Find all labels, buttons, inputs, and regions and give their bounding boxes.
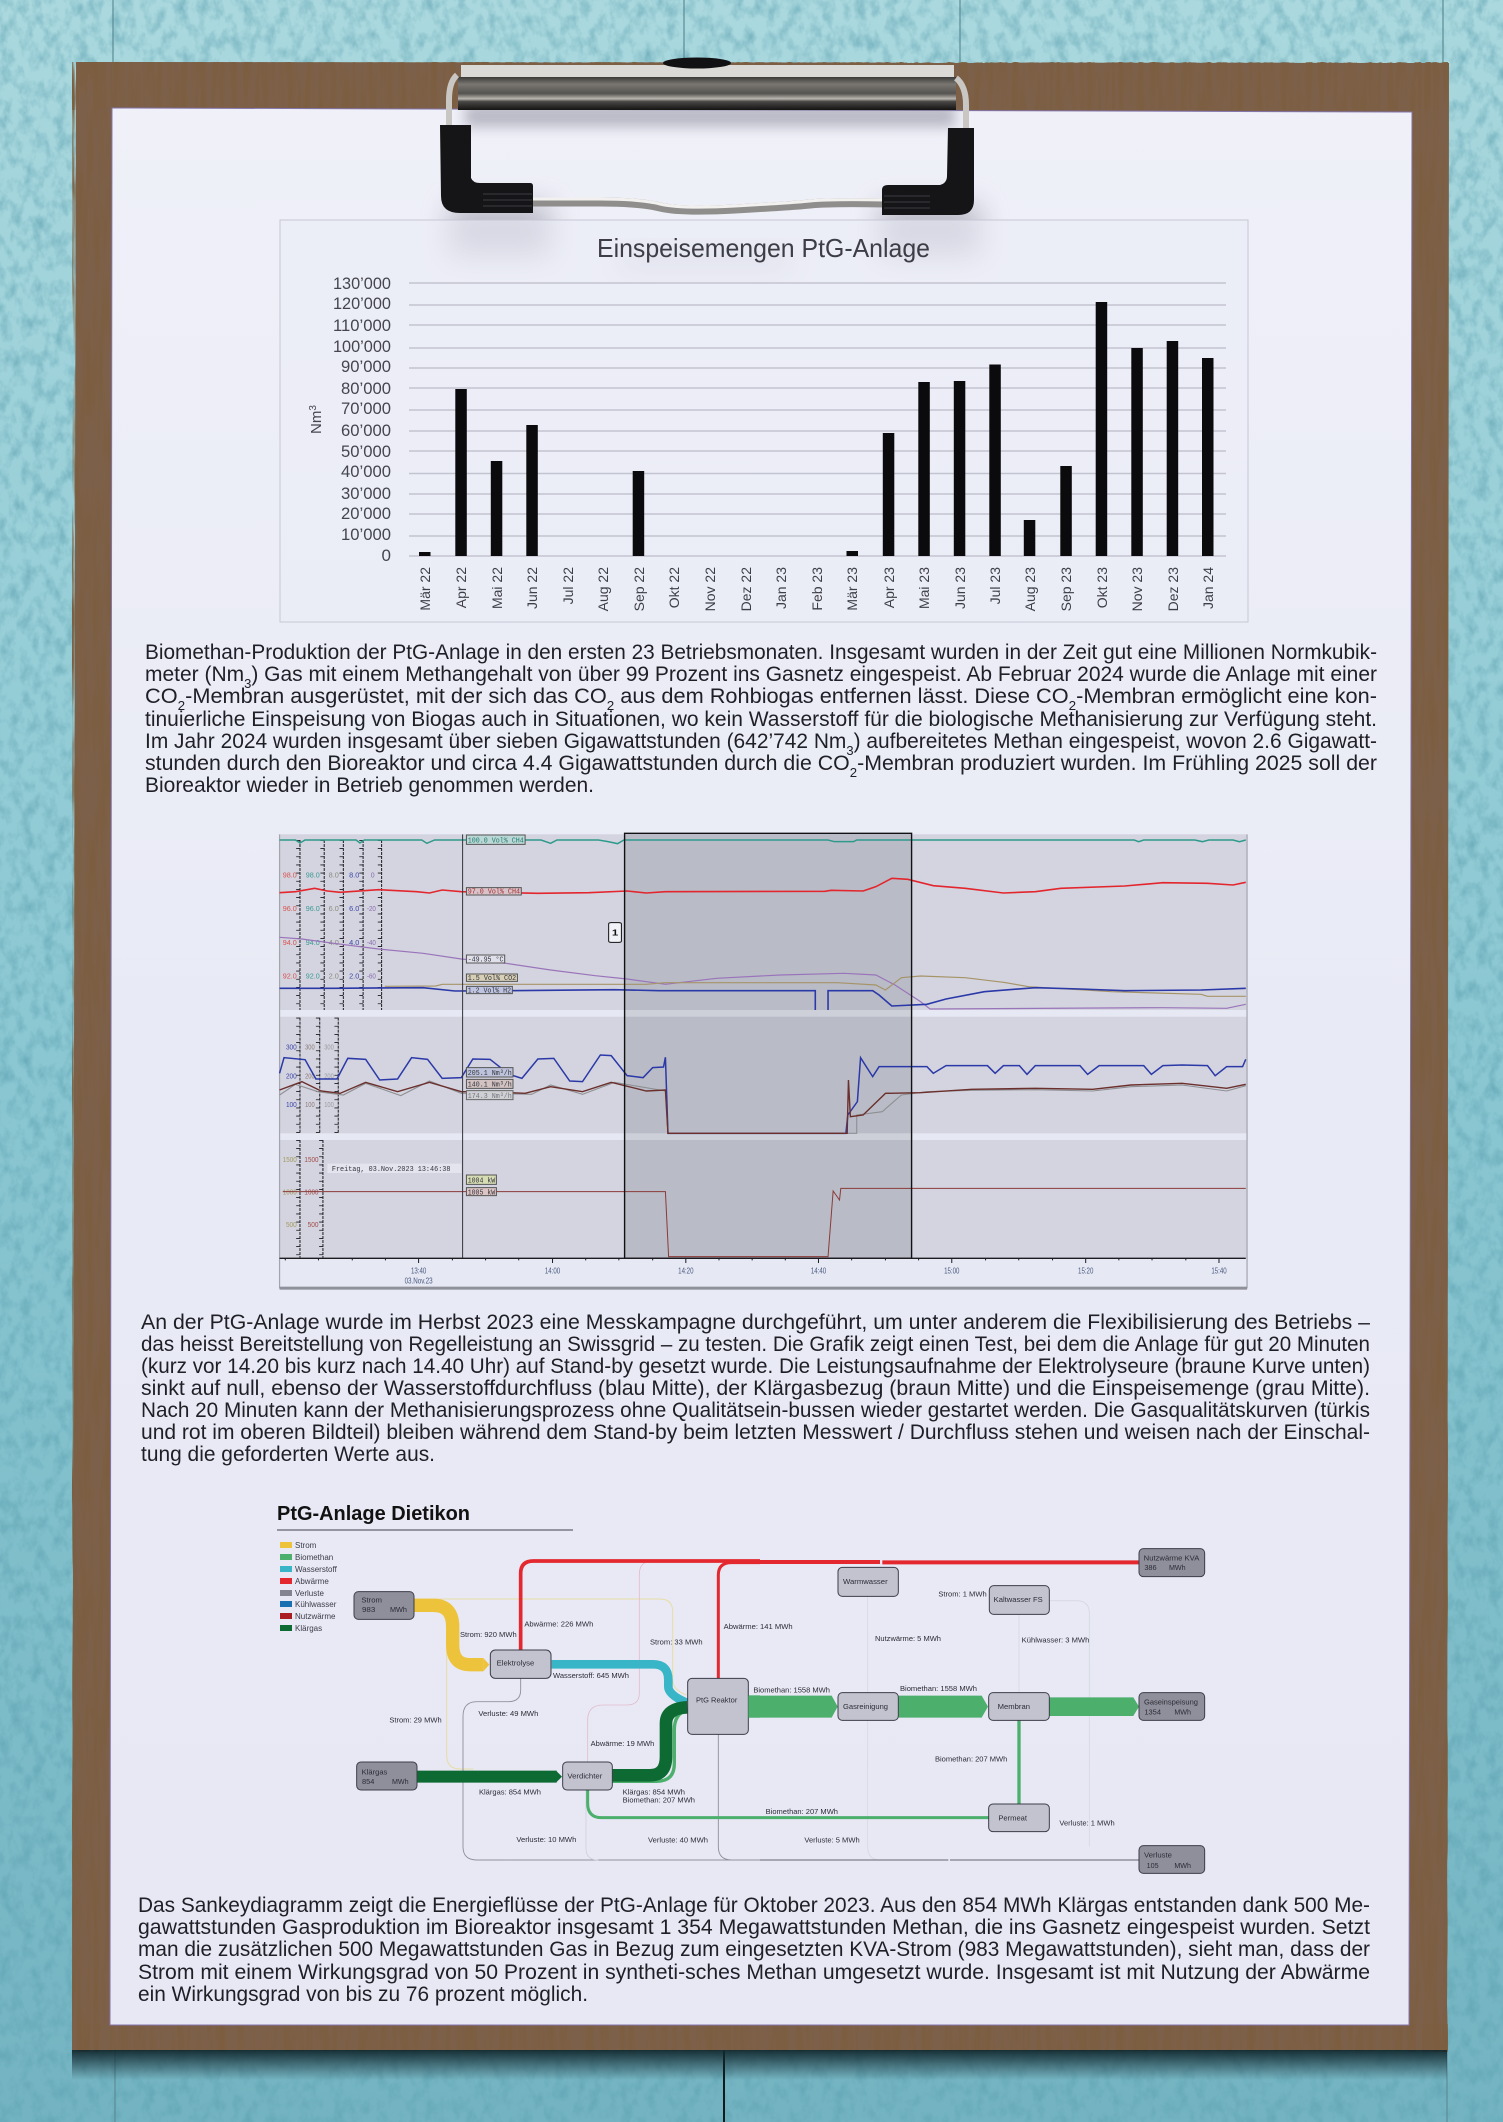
node: Verluste: MWh xyxy=(1174,1861,1191,1870)
x axis labels: Dez 23 xyxy=(1165,567,1181,611)
y axis title: 3 xyxy=(308,405,319,411)
time axis: 15:00 xyxy=(944,1266,960,1276)
text block: Biomethan production: Gas mit einem Methangehalt von über 99 Prozent ins Gasnetz eingespeist. Ab Februar 2024 wurde die Anlage mit einer xyxy=(264,663,1378,686)
text block: sankey explanation: Strom mit einem Wirkungsgrad von 50 Prozent in syntheti-sches Methan umgesetzt wurde. Insgesamt ist mit Nutzung der Abwärme xyxy=(138,1961,1370,1984)
axis labels: 1500 xyxy=(283,1156,297,1164)
flow: Abwärme 141 xyxy=(718,1563,760,1679)
time axis xyxy=(280,1258,1246,1285)
curve: electrolyser power xyxy=(283,1188,1246,1257)
axis labels: 100 xyxy=(305,1101,315,1109)
text block: Biomethan production: stunden durch den Bioreaktor und circa 4.4 Gigawattstunden durch die CO xyxy=(145,752,840,775)
text block: Biomethan production: 3 xyxy=(846,743,854,758)
node: Nutzwärme KVA: MWh xyxy=(1169,1563,1186,1572)
node: Gasreinigung xyxy=(838,1693,898,1720)
x axis labels xyxy=(417,567,1216,611)
node: Verluste: 105 xyxy=(1147,1861,1159,1870)
node: Verdichter: Verdichter xyxy=(567,1772,603,1781)
text block: measurement campaign: sinkt auf null, ebenso der Wasserstoffdurchfluss (blau Mitte), der Klärgasbezug (braun Mitte) und die Einspeisemenge (grau Mitte). xyxy=(141,1377,1370,1400)
y axis labels: 50’000 xyxy=(341,442,391,461)
stand-by window outline xyxy=(625,833,912,1258)
flow: Verluste xyxy=(463,1678,760,1860)
flow: Biomethan reactor out xyxy=(748,1695,760,1718)
sankey legend: Wasserstoff xyxy=(295,1565,338,1574)
flow labels left: Verluste: 49 MWh xyxy=(478,1709,538,1718)
text block: measurement campaign: und rot im oberen Bildteil) bleiben während dem Stand-by beim letzten Messwert / Durchfluss stehen und weisen nach der Einschal- xyxy=(141,1421,1370,1444)
sankey legend xyxy=(280,1541,338,1633)
metal clip xyxy=(440,58,974,215)
text block: sankey explanation xyxy=(138,1894,1370,2006)
flow labels left: Wasserstoff: 645 MWh xyxy=(553,1671,629,1680)
axis labels: 0 xyxy=(371,871,375,879)
flow labels left: Verluste: 40 MWh xyxy=(648,1836,708,1845)
flow labels left: Klärgas: 854 MWh xyxy=(623,1787,685,1796)
node: Strom: MWh xyxy=(390,1605,407,1614)
sankey legend: Nutzwärme xyxy=(295,1612,336,1621)
text block: Biomethan production: -Membran ermöglicht eine kon- xyxy=(1076,685,1377,708)
node: Klärgas xyxy=(357,1762,417,1790)
text block: Biomethan production: 2 xyxy=(1069,698,1076,713)
trend background xyxy=(280,834,1247,1288)
flow labels right: Biomethan: 207 MWh xyxy=(935,1755,1007,1764)
node: Verdichter xyxy=(563,1762,612,1790)
y axis labels: 30’000 xyxy=(341,484,391,503)
text block: Biomethan production: 2 xyxy=(607,698,614,713)
flow labels right: Abwärme: 141 MWh xyxy=(724,1622,793,1631)
text block: measurement campaign: An der PtG-Anlage wurde im Herbst 2023 eine Messkampagne durchgeführt, um unter anderem die Flexibilisierung des Betriebs – xyxy=(141,1311,1370,1334)
x axis labels: Dez 22 xyxy=(738,567,754,611)
time axis: 14:00 xyxy=(545,1266,560,1276)
timestamp: Freitag, 03.Nov.2023 13:46:38 xyxy=(332,1164,450,1174)
axis labels: 4.0 xyxy=(329,939,339,947)
text block: Biomethan production: Biomethan-Produktion der PtG-Anlage in den ersten 23 Betriebsmonaten. Insgesamt wurden in der Zeit gut eine Millionen Normkubik- xyxy=(145,641,1377,664)
value tags: 1005 kW xyxy=(468,1188,496,1197)
flow: Biomethan permeate return xyxy=(588,1790,760,1818)
time axis: 13:40 xyxy=(411,1266,426,1276)
x axis labels: Jun 23 xyxy=(952,567,968,609)
axis labels: 300 xyxy=(305,1043,315,1051)
x axis labels: Nov 22 xyxy=(702,567,718,611)
timestamp xyxy=(327,1164,461,1174)
x axis labels: Jan 24 xyxy=(1200,567,1216,609)
text block: measurement campaign: tung die geforderten Werte aus. xyxy=(141,1443,435,1466)
axis labels: 1000 xyxy=(283,1188,297,1196)
node: Kaltwasser FS xyxy=(989,1586,1049,1614)
text block: measurement campaign xyxy=(141,1311,1370,1466)
clip wire handle xyxy=(530,202,885,210)
axis labels: 4.0 xyxy=(349,939,359,947)
time axis: 14:40 xyxy=(811,1266,826,1276)
time axis: 15:20 xyxy=(1078,1266,1093,1276)
x axis labels: Apr 23 xyxy=(881,567,897,608)
gridlines xyxy=(409,283,1226,556)
x axis labels: Aug 23 xyxy=(1022,567,1038,611)
y axis labels: 130’000 xyxy=(333,274,391,293)
axis labels: 98.0 xyxy=(306,871,320,879)
x axis labels: Mär 23 xyxy=(844,567,860,611)
x axis labels: Sep 22 xyxy=(631,567,647,611)
sankey legend: Biomethan xyxy=(295,1553,333,1562)
text block: Biomethan production: CO xyxy=(145,685,176,708)
y axis labels: 0 xyxy=(382,546,391,565)
process trend chart screenshot: -20 xyxy=(367,905,376,913)
process trend chart screenshot xyxy=(280,833,1247,1290)
node: Gasreinigung: Gasreinigung xyxy=(843,1702,888,1711)
text block: sankey explanation: gawattstunden Gasproduktion im Bioreaktor insgesamt 1 354 Megawattstunden Methan, die ins Gasnetz eingespeist wurden. Setzt xyxy=(138,1916,1370,1939)
flow labels right: Strom: 1 MWh xyxy=(938,1589,987,1598)
node: Strom: 983 xyxy=(362,1605,375,1614)
text block: measurement campaign: Nach 20 Minuten kann der Methanisierungsprozess ohne Qualitätsein-bussen wieder gestartet werden. Die Gasqualitätskurven (türkis xyxy=(141,1399,1370,1422)
flow: Abwärme 19 xyxy=(588,1562,650,1762)
text block: Biomethan production xyxy=(145,641,1377,797)
flow: Strom 33 and 29 xyxy=(414,1599,687,1769)
axis labels xyxy=(283,871,376,1229)
time axis: 15:40 xyxy=(1211,1266,1227,1276)
flow labels left: Strom: 29 MWh xyxy=(389,1715,442,1724)
value tags xyxy=(466,835,525,1197)
y axis labels: 60’000 xyxy=(341,421,391,440)
axis labels: 500 xyxy=(286,1221,297,1229)
axis labels: 500 xyxy=(308,1221,318,1229)
node: Klärgas: MWh xyxy=(392,1777,409,1786)
axis labels: 8.0 xyxy=(349,871,359,879)
axis labels: 1500 xyxy=(304,1156,318,1164)
flow labels right: Verluste: 5 MWh xyxy=(804,1836,860,1845)
axis labels: 6.0 xyxy=(329,905,339,913)
sankey legend: Verluste xyxy=(295,1589,324,1598)
flow labels right: Kühlwasser: 3 MWh xyxy=(1022,1636,1089,1645)
node: Gaseinspeisung: Gaseinspeisung xyxy=(1144,1697,1198,1706)
x axis labels: Okt 22 xyxy=(666,567,682,608)
node: Strom: Strom xyxy=(361,1596,382,1605)
flow labels right: Nutzwärme: 5 MWh xyxy=(875,1634,941,1643)
node: Membran xyxy=(989,1693,1049,1720)
node: Warmwasser: Warmwasser xyxy=(843,1577,888,1586)
axis labels: 96.0 xyxy=(283,905,297,913)
flow: pale Nutzwärme and Kühlwasser xyxy=(868,1596,1089,1860)
text block: Biomethan production: 3 xyxy=(244,676,251,691)
node: PtG Reaktor: PtG Reaktor xyxy=(696,1696,738,1705)
node: PtG Reaktor xyxy=(688,1678,748,1734)
text block: sankey explanation: Das Sankeydiagramm zeigt die Energieflüsse der PtG-Anlage für Oktober 2023. Aus den 854 MWh Klärgas entstanden dank 500 Me- xyxy=(138,1894,1370,1917)
text block: Biomethan production: ) xyxy=(251,663,258,686)
y axis labels: 80’000 xyxy=(341,379,391,398)
upper axes xyxy=(298,840,382,1258)
node: Verluste: Verluste xyxy=(1144,1850,1172,1859)
curve: hydrogen flow blue xyxy=(280,1055,1246,1133)
node: Elektrolyse: Elektrolyse xyxy=(497,1659,534,1668)
axis labels: 94.0 xyxy=(306,939,320,947)
y axis title: Nm xyxy=(308,411,325,434)
value tags: 1.5 Vol% CO2 xyxy=(468,973,516,983)
cursor line xyxy=(462,834,464,1258)
value tags: 1.2 Vol% H2 xyxy=(468,986,511,995)
axis labels: 98.0 xyxy=(283,871,297,879)
x axis labels: Feb 23 xyxy=(809,567,825,611)
node: Warmwasser xyxy=(838,1567,898,1596)
text block: Biomethan production: -Membran produziert wurden. Im Frühling 2025 soll der xyxy=(857,752,1377,775)
text block: Biomethan production: tinuierliche Einspeisung von Biogas auch in Situationen, wo kein Wasserstoff für die biologische Methanisierung zur Verfügung steht. xyxy=(145,708,1377,731)
curve: temperature purple xyxy=(280,937,1246,1009)
text block: sankey explanation: man die zusätzlichen 500 Megawattstunden Gas in Bezug zum eingesetzten KVA-Strom (983 Megawattstunden), sieht man, dass der xyxy=(138,1938,1370,1961)
node: Verluste xyxy=(1139,1846,1205,1873)
flow labels left: Biomethan: 207 MWh xyxy=(623,1796,695,1805)
y axis labels: 70’000 xyxy=(341,399,391,418)
text block: measurement campaign: das heisst Bereitstellung von Regelleistung an Swissgrid – zu testen. Die Grafik zeigt einen Test, bei dem die Anlage für gut 20 Minuten xyxy=(141,1333,1370,1356)
chart title: Einspeisemengen PtG-Anlage xyxy=(597,233,930,263)
value tags: 97.0 Vol% CH4 xyxy=(468,887,520,896)
text block: Biomethan production: 2 xyxy=(850,765,857,780)
flow: Biomethan main xyxy=(748,1696,1139,1718)
x axis labels: Jul 22 xyxy=(560,567,576,604)
curve: H2 blue xyxy=(280,988,1246,1010)
flow labels right: Biomethan: 1558 MWh xyxy=(753,1685,830,1694)
node: Gaseinspeisung: 1354 xyxy=(1144,1707,1162,1716)
axis labels: 96.0 xyxy=(306,905,320,913)
x axis labels: Jun 22 xyxy=(524,567,540,609)
flow: Nutzwärme KVA xyxy=(760,1556,1139,1568)
x axis labels: Jan 23 xyxy=(773,567,789,609)
axis labels: 200 xyxy=(305,1072,315,1080)
curve: CO2 tan xyxy=(385,976,1246,996)
process trend chart screenshot: 100.0 Vol% CH4 xyxy=(468,836,524,845)
flow labels left: Verluste: 10 MWh xyxy=(516,1835,576,1844)
axis labels: 100 xyxy=(286,1101,297,1109)
node: Gaseinspeisung xyxy=(1139,1693,1205,1720)
text block: Biomethan production: meter (Nm xyxy=(145,663,244,686)
x axis labels: Apr 22 xyxy=(453,567,469,608)
sankey heading: PtG-Anlage Dietikon xyxy=(277,1503,470,1525)
text block: measurement campaign: (kurz vor 14.20 bis kurz nach 14.40 Uhr) auf Stand-by gesetzt wurde. Die Leistungsaufnahme der Elektrolyseure (braune Kurve unten) xyxy=(141,1355,1370,1378)
flow labels left: Klärgas: 854 MWh xyxy=(479,1787,541,1796)
axis labels: 100 xyxy=(324,1101,334,1109)
x axis labels: Jul 23 xyxy=(987,567,1003,604)
value tags: 174.3 Nm³/h xyxy=(468,1091,512,1101)
flow: Klärgas xyxy=(417,1707,687,1783)
y axis labels: 100’000 xyxy=(333,337,391,356)
sankey legend: Abwärme xyxy=(295,1577,329,1586)
value tags: 140.1 Nm³/h xyxy=(468,1080,512,1089)
bar chart panel: Einspeisemengen xyxy=(280,220,1248,622)
flow labels left: Strom: 33 MWh xyxy=(650,1638,703,1647)
value tags: 205.1 Nm³/h xyxy=(468,1068,512,1078)
axis labels: 200 xyxy=(286,1072,297,1080)
highlighted stand-by window xyxy=(625,833,912,1258)
sankey legend: Strom xyxy=(295,1541,317,1550)
curve: biogas brown xyxy=(280,1080,1246,1133)
flow: Wasserstoff xyxy=(552,1664,687,1703)
x axis labels: Sep 23 xyxy=(1058,567,1074,611)
process trend chart screenshot: -60 xyxy=(367,973,376,981)
flow labels right: Biomethan: 1558 MWh xyxy=(900,1684,977,1693)
text block: sankey explanation: ein Wirkungsgrad von bis zu 76 prozent möglich. xyxy=(138,1983,588,2006)
text block: Biomethan production: 2 xyxy=(178,698,185,713)
axis labels: 92.0 xyxy=(283,973,297,981)
text block: Biomethan production: aufbereitetes Methan eingespeist, wovon 2.6 Gigawatt- xyxy=(866,730,1379,753)
sankey diagram: left part xyxy=(354,1561,760,1860)
flow labels left: Abwärme: 19 MWh xyxy=(591,1739,654,1748)
y axis labels: 20’000 xyxy=(341,504,391,523)
text block: Biomethan production: ) xyxy=(854,730,861,753)
flow labels right: Biomethan: 207 MWh xyxy=(766,1807,838,1816)
x axis labels: Okt 23 xyxy=(1094,567,1110,608)
axis labels: 94.0 xyxy=(283,939,297,947)
curve: CH4 turquoise xyxy=(280,840,1246,844)
flow labels left xyxy=(389,1619,708,1845)
axis labels: 92.0 xyxy=(306,973,320,981)
node: Strom xyxy=(354,1592,414,1619)
node: Elektrolyse xyxy=(490,1650,551,1678)
curve: CH4 red xyxy=(280,878,1246,893)
clip left handle xyxy=(440,125,533,213)
flow: Biomethan permeate xyxy=(760,1813,989,1822)
x axis labels: Mai 22 xyxy=(489,567,505,609)
curve: feed grey xyxy=(280,1081,1246,1133)
y axis labels: 40’000 xyxy=(341,462,391,481)
x axis labels: Nov 23 xyxy=(1129,567,1145,611)
axis labels: 300 xyxy=(324,1043,334,1051)
flow labels right xyxy=(724,1589,1115,1845)
clip shadow on paper xyxy=(450,105,980,270)
flow labels left: Abwärme: 226 MWh xyxy=(524,1619,593,1628)
clip top plate xyxy=(461,65,954,78)
axis labels: 200 xyxy=(324,1072,334,1080)
paper sheet xyxy=(110,108,1412,2025)
node: Permeat xyxy=(989,1804,1049,1832)
sankey legend: Klärgas xyxy=(295,1624,322,1633)
flow labels right: Verluste: 1 MWh xyxy=(1059,1819,1115,1828)
text block: Biomethan production: -Membran ausgerüstet, mit der sich das CO xyxy=(185,685,607,708)
y axis labels: 10’000 xyxy=(341,525,391,544)
clip side wires xyxy=(449,75,966,131)
node: Nutzwärme KVA: 386 xyxy=(1144,1563,1157,1572)
node: Nutzwärme KVA xyxy=(1139,1549,1205,1577)
time axis: 03.Nov.23 xyxy=(405,1276,433,1285)
flow: Abwärme 226 xyxy=(521,1561,760,1650)
y axis labels: 110’000 xyxy=(333,316,391,335)
y axis labels: 90’000 xyxy=(341,357,391,376)
text block: Biomethan production: aus dem Rohbiogas entfernen lässt. Diese CO xyxy=(614,685,1069,708)
marker 1: 1 xyxy=(612,928,618,938)
axis labels: 300 xyxy=(286,1043,297,1051)
node: Membran: Membran xyxy=(998,1702,1030,1711)
axis labels: 1000 xyxy=(304,1188,318,1196)
axis labels: 8.0 xyxy=(329,871,339,879)
node: Klärgas: 854 xyxy=(362,1777,375,1786)
x axis labels: Mär 22 xyxy=(417,567,433,611)
value tags: 1004 kW xyxy=(468,1176,496,1185)
clip right handle xyxy=(882,128,974,215)
y axis labels: 120’000 xyxy=(333,294,391,313)
flow: Strom 920 xyxy=(414,1605,489,1671)
axis labels: 2.0 xyxy=(349,973,359,981)
clip bar xyxy=(458,77,956,110)
node: Kaltwasser FS: Kaltwasser FS xyxy=(994,1595,1043,1604)
bars xyxy=(419,302,1214,556)
y axis labels xyxy=(333,274,391,565)
process trend chart screenshot: -40 xyxy=(367,939,376,947)
marker 1 xyxy=(609,923,621,942)
node: Klärgas: Klärgas xyxy=(362,1767,387,1776)
clip knob xyxy=(663,58,731,68)
x axis labels: Aug 22 xyxy=(595,567,611,611)
node: Gaseinspeisung: MWh xyxy=(1174,1707,1191,1716)
node: Permeat: Permeat xyxy=(998,1814,1028,1823)
axis labels: 6.0 xyxy=(349,905,359,913)
sankey legend: Kühlwasser xyxy=(295,1600,337,1609)
flow labels left: Strom: 920 MWh xyxy=(460,1630,517,1639)
sankey diagram: right part xyxy=(724,1549,1205,1873)
node: Nutzwärme KVA: Nutzwärme KVA xyxy=(1144,1553,1200,1562)
value tags: -49.95 °C xyxy=(468,955,503,964)
text block: Biomethan production: Bioreaktor wieder in Betrieb genommen werden. xyxy=(145,774,594,797)
time axis: 14:20 xyxy=(678,1266,694,1276)
axis labels: 2.0 xyxy=(329,973,339,981)
x axis labels: Mai 23 xyxy=(916,567,932,609)
text block: Biomethan production: Im Jahr 2024 wurden insgesamt über sieben Gigawattstunden (642’742 Nm xyxy=(145,730,849,753)
flow: Verluste to sink xyxy=(760,1858,1139,1862)
